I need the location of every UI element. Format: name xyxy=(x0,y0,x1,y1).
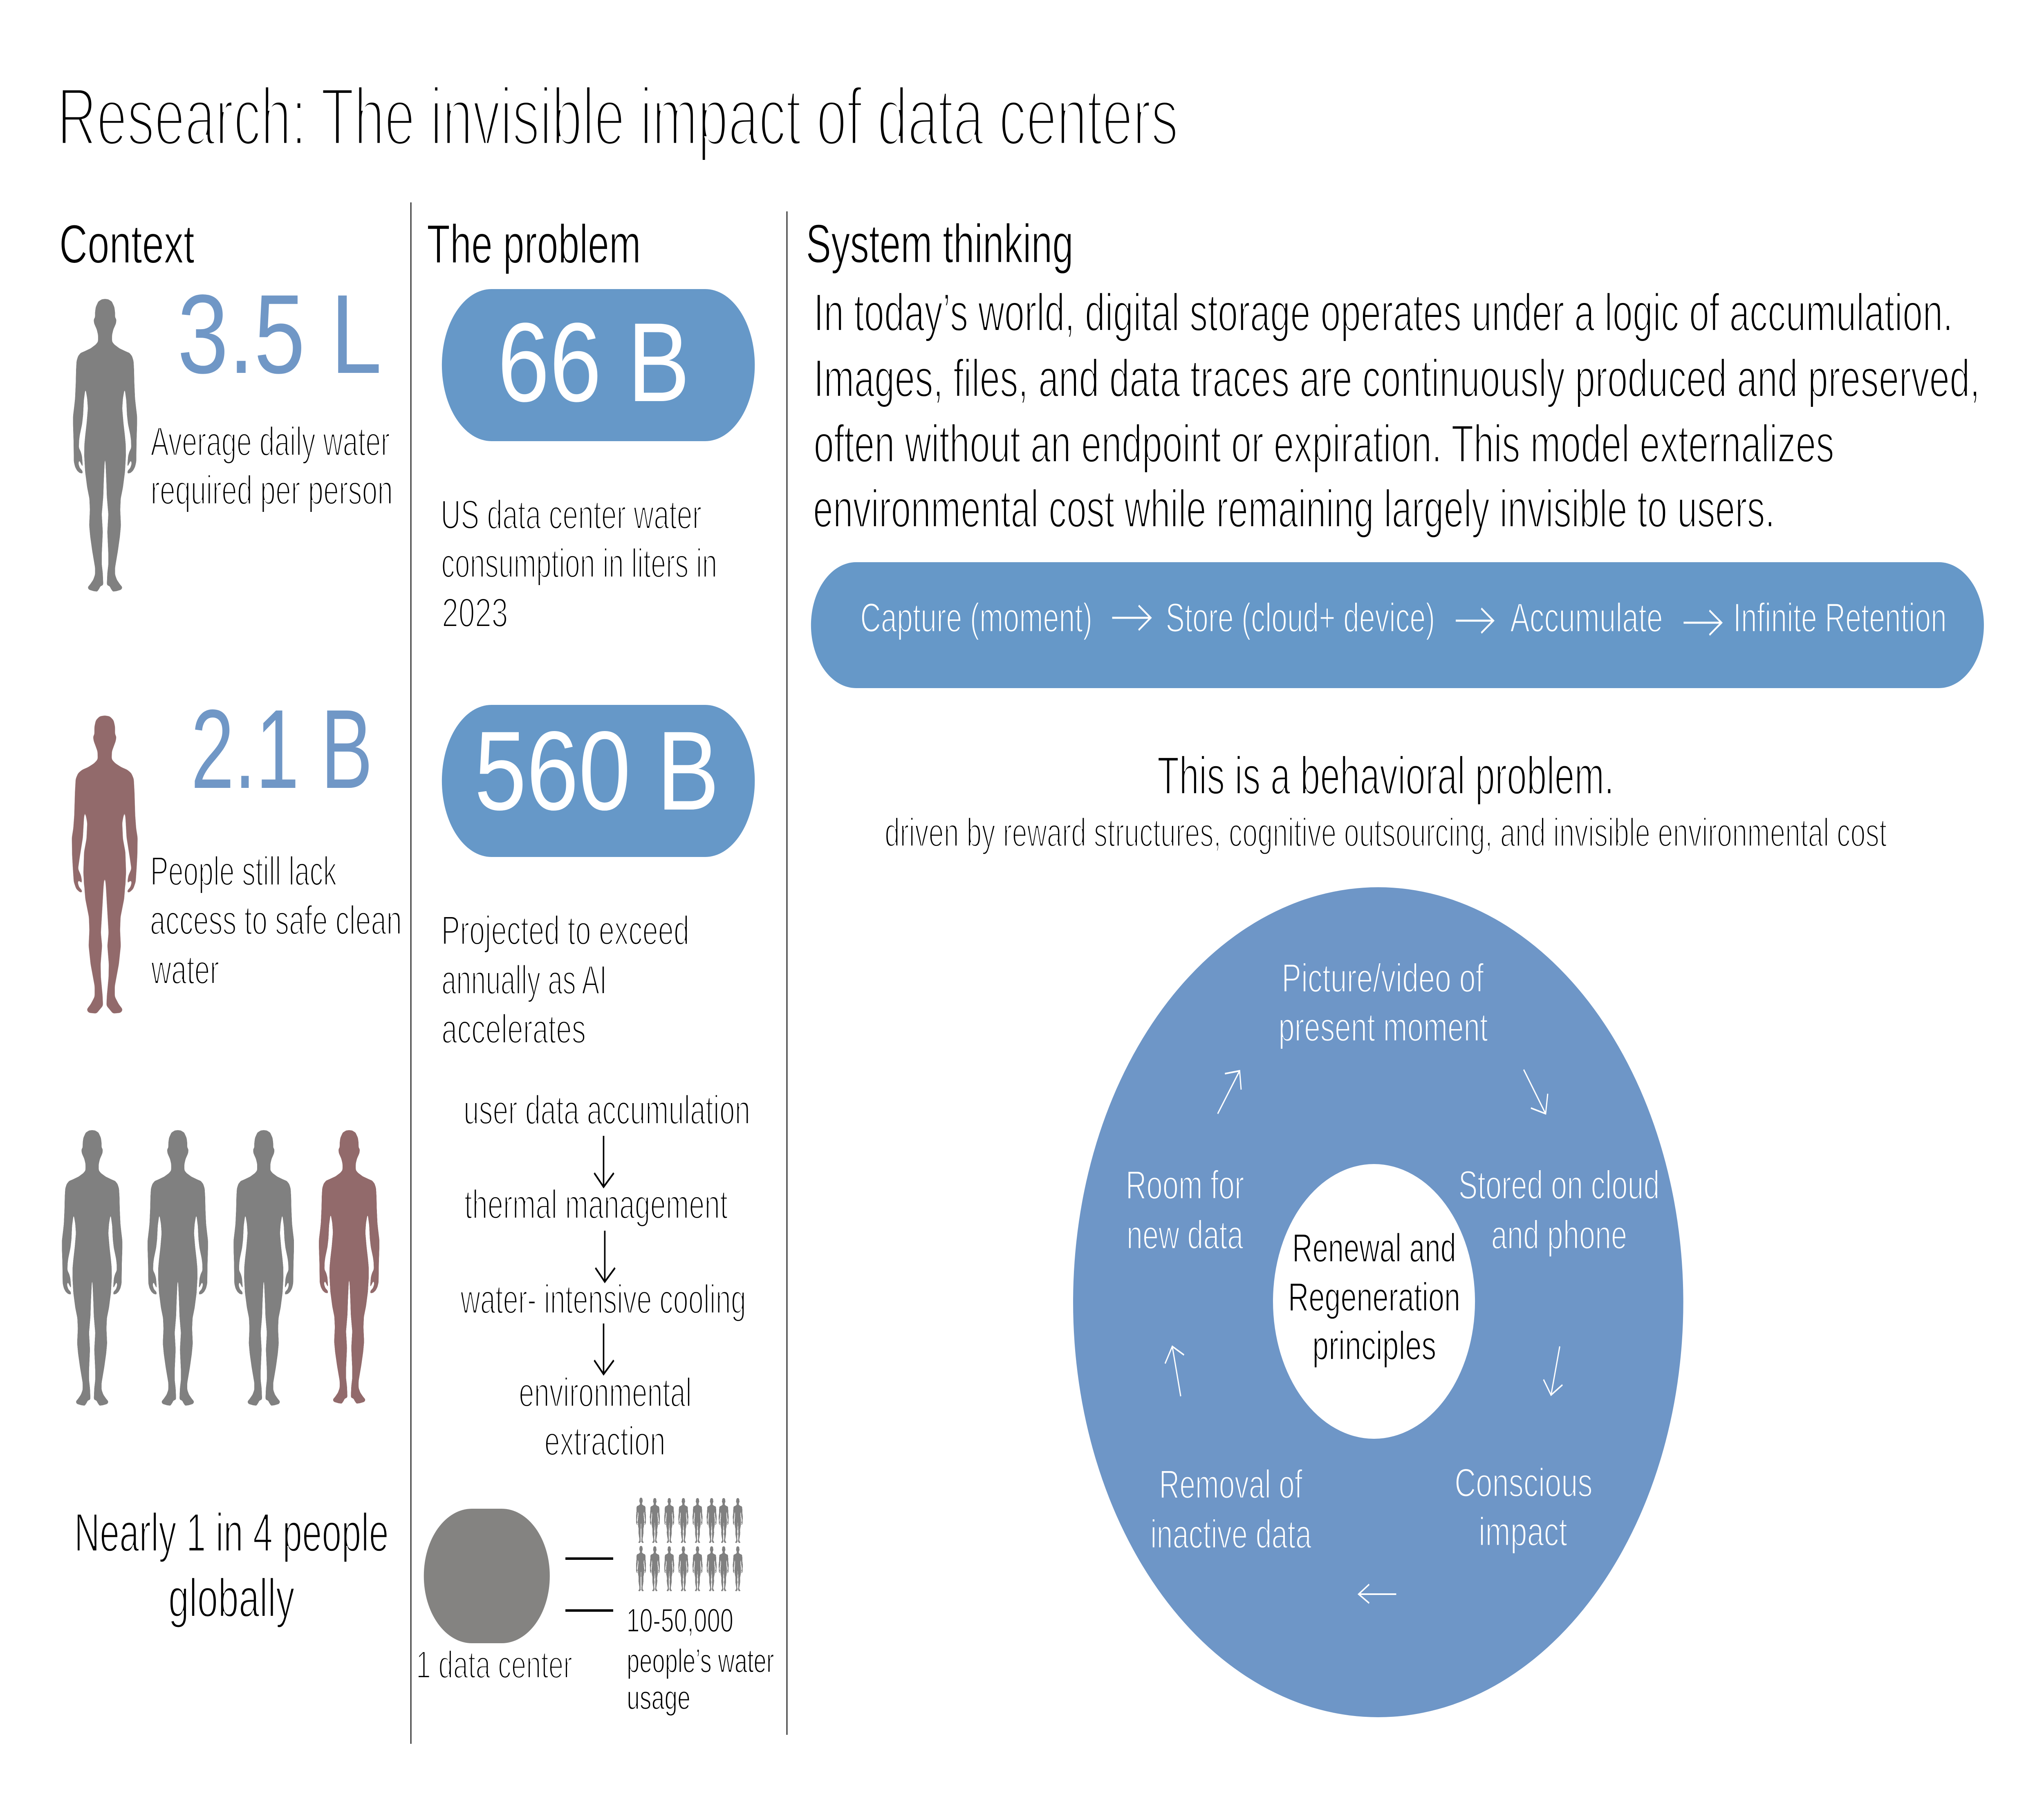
pictogram: 1 in 4 people xyxy=(62,1130,379,1406)
hub label: Regeneration xyxy=(1288,1275,1460,1320)
equals sign xyxy=(565,1559,613,1611)
hub label: principles xyxy=(1312,1323,1436,1368)
stat: 3.5 L: 3.5 L xyxy=(177,272,382,397)
icon: person red xyxy=(319,1130,379,1404)
flow: accumulation to extraction xyxy=(460,1087,750,1464)
node: stored on cloud: Stored on cloud xyxy=(1459,1163,1660,1208)
hub xyxy=(1273,1164,1475,1439)
paragraph: accumulation logic xyxy=(813,283,1980,538)
arrow xyxy=(1218,1071,1241,1114)
text: US consumption: US data center water xyxy=(441,492,702,538)
text: lacking safe water: water xyxy=(151,947,219,993)
panel: context xyxy=(59,213,402,1628)
heading: system thinking: System thinking xyxy=(806,213,1074,274)
node: removal of inactive data: inactive data xyxy=(1150,1512,1311,1557)
paragraph: accumulation logic: environmental cost while remaining largely invisible to users. xyxy=(813,480,1775,538)
icon: person gray 1 xyxy=(62,1130,122,1406)
panel: the problem xyxy=(416,213,774,1716)
hub label: Renewal and xyxy=(1292,1226,1456,1271)
arrow down xyxy=(594,1323,614,1374)
node: stored on cloud: and phone xyxy=(1491,1213,1627,1258)
node: picture or video xyxy=(1278,956,1488,1050)
node: room for new data xyxy=(1126,1163,1244,1258)
node: room for new data: Room for xyxy=(1126,1163,1244,1208)
node: picture or video: Picture/video of xyxy=(1282,956,1484,1001)
step: user data accumulation: user data accumulation xyxy=(464,1087,750,1133)
text: projection: annually as AI xyxy=(442,957,607,1003)
text: daily water: Average daily water xyxy=(150,419,390,464)
hub label xyxy=(1288,1226,1460,1368)
step: environmental extraction: extraction xyxy=(545,1418,666,1464)
node: stored on cloud xyxy=(1459,1163,1660,1258)
pill: 560 B xyxy=(442,705,755,857)
step: capture: Capture (moment) xyxy=(860,595,1092,641)
icon: person gray xyxy=(73,299,137,592)
text: lacking safe water xyxy=(150,848,402,993)
node: conscious impact xyxy=(1455,1460,1593,1554)
node: removal of inactive data xyxy=(1150,1462,1311,1557)
node: room for new data: new data xyxy=(1127,1213,1243,1258)
step: accumulate: Accumulate xyxy=(1510,595,1663,641)
text: daily water: required per person xyxy=(150,467,393,513)
text: US consumption: consumption in liters in xyxy=(441,541,717,586)
text: projection: Projected to exceed xyxy=(441,908,689,953)
paragraph: accumulation logic: In today’s world, digital storage operates under a logic of accumulation. xyxy=(814,283,1953,342)
node: picture or video: present moment xyxy=(1278,1005,1488,1050)
step: infinite retention: Infinite Retention xyxy=(1733,595,1947,641)
shape: data center xyxy=(424,1509,550,1643)
arrow xyxy=(1683,610,1721,635)
pill: 66 B: 66 B xyxy=(498,300,690,425)
arrow xyxy=(1544,1346,1562,1395)
text: US consumption: 2023 xyxy=(442,590,508,636)
label: people water usage: 10-50,000 xyxy=(626,1602,733,1639)
paragraph: accumulation logic: often without an endpoint or expiration. This model externalizes xyxy=(814,415,1834,473)
pill: 560 B: 560 B xyxy=(474,709,719,834)
arrow down xyxy=(594,1136,614,1187)
step: water-intensive cooling: water- intensive cooling xyxy=(460,1276,746,1322)
step: environmental extraction: environmental xyxy=(519,1370,692,1415)
text: lacking safe water: People still lack xyxy=(150,848,337,894)
label: people water usage: usage xyxy=(627,1679,690,1716)
node: conscious impact: Conscious xyxy=(1455,1460,1593,1505)
text: projection: accelerates xyxy=(442,1006,586,1052)
text: nearly 1 in 4: Nearly 1 in 4 people xyxy=(74,1502,389,1563)
pill: linear storage flow xyxy=(811,562,1984,688)
arrow xyxy=(1359,1584,1396,1603)
diagram: regeneration cycle xyxy=(1073,887,1683,1717)
text: nearly 1 in 4 xyxy=(74,1502,389,1628)
pill: 66 B xyxy=(442,289,755,441)
icon: person gray 2 xyxy=(148,1130,208,1406)
title: Research: The invisible impact of data centers xyxy=(57,71,1178,162)
panel: system thinking xyxy=(806,213,1984,1717)
arrow xyxy=(1456,608,1493,633)
text: daily water xyxy=(150,419,393,513)
ring xyxy=(1073,887,1683,1717)
stat: 2.1 B: 2.1 B xyxy=(191,687,373,812)
heading: context: Context xyxy=(59,213,195,274)
text: lacking safe water: access to safe clean xyxy=(150,897,402,943)
arrow down xyxy=(596,1231,615,1282)
node: conscious impact: impact xyxy=(1479,1510,1567,1554)
step: environmental extraction xyxy=(519,1370,692,1464)
text: US consumption xyxy=(441,492,717,636)
label: people water usage: people’s water xyxy=(627,1642,774,1680)
step: thermal management: thermal management xyxy=(464,1182,728,1227)
text: nearly 1 in 4: globally xyxy=(168,1567,295,1628)
statement: behavioral problem: This is a behavioral problem. xyxy=(1157,746,1614,805)
heading: the problem: The problem xyxy=(427,213,641,274)
paragraph: accumulation logic: Images, files, and data traces are continuously produced and preserved, xyxy=(814,349,1980,408)
node: removal of inactive data: Removal of xyxy=(1159,1462,1303,1507)
column divider: context / problem xyxy=(410,202,412,1744)
arrow xyxy=(1165,1346,1184,1396)
icon: person red xyxy=(72,716,138,1014)
label: people water usage xyxy=(626,1602,774,1716)
icons: small people grid xyxy=(636,1498,743,1591)
subtitle: drivers: driven by reward structures, cognitive outsourcing, and invisible environmental cost xyxy=(885,810,1887,855)
step: store: Store (cloud+ device) xyxy=(1165,595,1435,641)
arrow xyxy=(1112,606,1151,630)
text: projection xyxy=(441,908,689,1052)
label: 1 data center: 1 data center xyxy=(416,1643,572,1687)
arrow xyxy=(1524,1070,1548,1114)
equivalence: data center to people xyxy=(416,1498,774,1716)
icon: person gray 3 xyxy=(233,1130,294,1406)
